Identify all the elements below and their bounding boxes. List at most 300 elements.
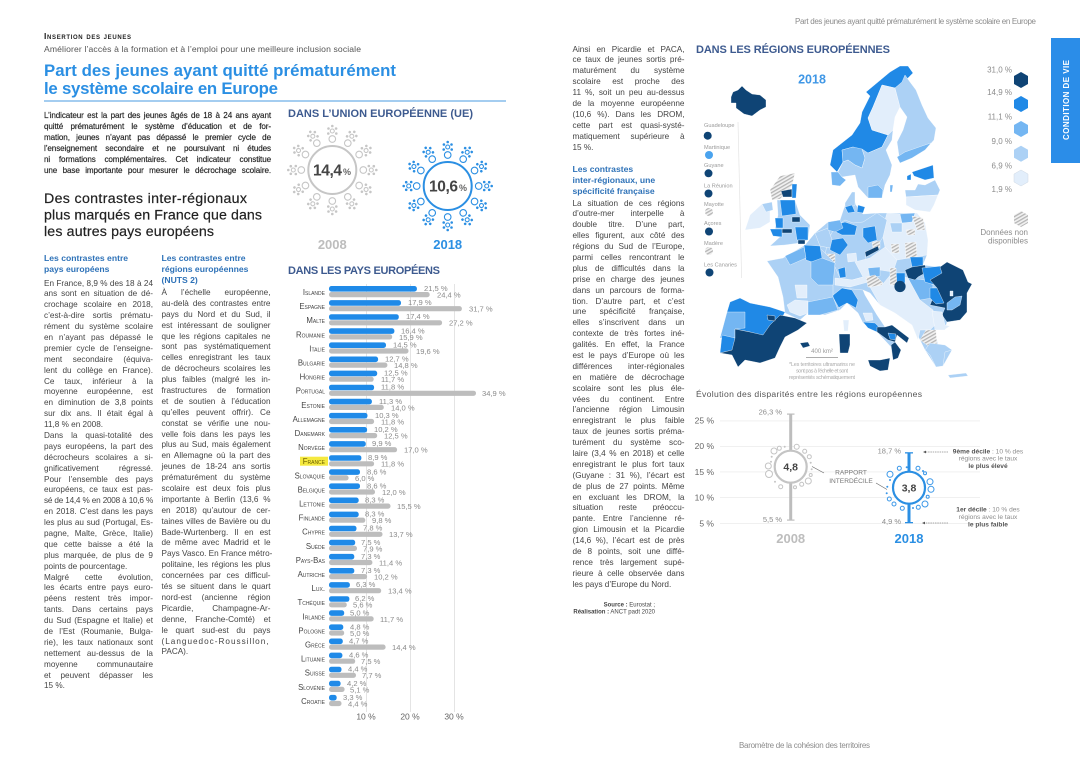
row: Slovaquie: 8,6 % [367, 467, 387, 476]
flower 2008: 14,4 %: 2008 [318, 237, 347, 252]
text column 3: bottom: scolaire sont les plus éle- [572, 384, 684, 393]
text column 1: Malgré cette évolution, [44, 573, 153, 582]
row: Espagne: 17,9 % [408, 298, 432, 307]
France [767, 245, 840, 320]
map scale and note [789, 349, 856, 381]
row: Suisse: 4,4 % [348, 665, 368, 674]
row: Finlande: Finlande [299, 514, 326, 523]
overseas: Les Canaries: Les Canaries [704, 262, 737, 268]
intro text [44, 110, 272, 175]
text column 1: du Sud (Espagne et Italie) et [44, 616, 153, 625]
Denmark [845, 192, 865, 213]
Norway [830, 66, 913, 172]
callout: 1er décile: régions avec le taux [959, 514, 1018, 521]
row: Roumanie: 15,9 % [399, 333, 423, 342]
row: Pologne: 4,8 % [350, 622, 370, 631]
row: Slovaquie: 6,0 % [355, 474, 375, 483]
text column 1: premier cycle de l’enseigne- [44, 344, 153, 353]
row: France: 8,9 % [368, 453, 388, 462]
callout: 9e décile: le plus élevé [968, 463, 1008, 470]
text column 1: moyenne européenne, est [44, 387, 153, 396]
main title [44, 61, 396, 98]
intro text: L’indicateur est la part des jeunes âgés de 18 à 24 ans ayant [44, 110, 271, 120]
callout: 1er décile: 1er décile : 10 % des [956, 506, 1020, 514]
axis labels [356, 712, 464, 722]
source [573, 602, 656, 616]
Italy [832, 288, 909, 371]
overseas: Mayotte: Mayotte [704, 202, 724, 208]
row: Belgique: Belgique [298, 485, 326, 494]
text column 2: prématurément du système [162, 473, 270, 482]
row: Malte: Malte [306, 316, 326, 325]
subheading: column 1: Les contrastes entre [44, 252, 128, 262]
row: Chypre: Chypre [302, 528, 326, 537]
row: Hongrie [300, 369, 408, 384]
row: Grèce: Grèce [305, 640, 326, 650]
text column 2: qu’elles peuvent offrir). Ce [162, 408, 270, 417]
row: Finlande: 9,8 % [372, 516, 392, 525]
text column 3: bottom: contexte de très fortes iné- [572, 329, 684, 338]
text column 1: lent du collège en France). [44, 366, 153, 375]
row: Slovénie: 4,2 % [347, 679, 367, 688]
map legend: 9,0 % [992, 137, 1012, 146]
map scale and note: 400 km² [811, 349, 833, 355]
text column 2: le quart sud-est du pays [162, 626, 270, 635]
text column 2: importante à Berlin (13,6 % [162, 495, 270, 504]
text column 2: À l’échelle européenne, [162, 288, 270, 297]
flower 2008: 14,4 %: 14,4 [313, 162, 342, 180]
subheading: column 2: régions européennes [162, 264, 248, 274]
subheading: column 3 [572, 164, 655, 196]
section tab: condition de vie: CONDITION DE VIE [1062, 59, 1071, 140]
text column 2: nord-est (ancienne région [162, 593, 270, 602]
row: Lettonie: 15,5 % [397, 502, 421, 511]
row: Hongrie: 12,5 % [384, 369, 408, 378]
Ireland [745, 202, 773, 230]
text column 1: Dans la quasi-totalité des [44, 431, 153, 440]
row: Autriche: Autriche [298, 570, 326, 579]
row: Allemagne: 11,8 % [381, 417, 404, 426]
row: Belgique: 12,0 % [382, 488, 406, 497]
row: Malte: 27,2 % [449, 319, 473, 328]
row: Pays-Bas [296, 552, 402, 567]
row: Islande: 24,4 % [437, 290, 461, 300]
row: Irlande: 5,0 % [350, 608, 370, 617]
text column 3: bottom: de 8 points, soit une diffé- [572, 547, 684, 556]
Baltic states [905, 165, 940, 212]
text column 3: top: scolaire est proche des [572, 77, 684, 86]
row: Pologne: 5,0 % [350, 629, 370, 638]
text column 3: bottom: plus de difficultés dans la [572, 264, 684, 273]
overseas: Açores [704, 221, 722, 236]
text column 2: Picardie, Champagne-Ar- [162, 604, 270, 613]
text column 2: constat se vérifie une nou- [162, 419, 270, 428]
text column 3: bottom: dans un parcours de forma- [572, 286, 684, 295]
row: Italie: 14,5 % [393, 340, 417, 349]
text column 1: c’est-à-dire sortis prématu- [44, 311, 153, 320]
row: Norvège [298, 439, 428, 455]
text column 1: les écarts entre pays euro- [44, 583, 153, 592]
section heading: contrasts [44, 191, 262, 240]
text column 2: scolaire est deux fois plus [162, 484, 270, 493]
Poland [882, 213, 928, 260]
y axis labels [695, 416, 714, 528]
text column 2: et de soutien à l’éducation [162, 397, 270, 406]
intro text: une base importante pour mesurer le décrochage scolaire. [44, 166, 271, 174]
row: Allemagne: Allemagne [293, 415, 326, 424]
flower 2018: 10,6 %: 10,6 [429, 178, 458, 196]
range 2008: 2008 [776, 531, 805, 546]
Iceland [731, 86, 766, 116]
text column 1: que cette baisse a été la [44, 540, 153, 549]
text column 3: bottom: en excluant les DROM, la [572, 493, 684, 502]
text column 1: 15 %. [44, 681, 65, 690]
text column 1: gnificativement régressé. [44, 464, 153, 473]
range 2008 [759, 408, 813, 546]
map scale and note: représentés schématiquement [789, 375, 856, 381]
row: Croatie: 4,4 % [348, 699, 368, 708]
overseas: Les Canaries [704, 262, 737, 276]
text column 2 [161, 288, 272, 656]
row: Chypre: 7,8 % [363, 524, 383, 533]
label: rapport interdécile [812, 466, 887, 490]
text column 1: en 2018. C’est dans les pays [44, 507, 153, 516]
map legend: Données non [980, 228, 1028, 237]
text column 3: bottom: différences inter-régionales [572, 362, 684, 371]
text column 1: En France, 8,9 % des 18 à 24 [44, 278, 153, 288]
text column 3: top: 15 %. [572, 143, 593, 152]
text column 2: que les régions capitales ne [162, 332, 270, 341]
row: Roumanie: 16,4 % [401, 326, 425, 335]
axis labels: 20 % [400, 712, 420, 722]
row: Portugal [296, 383, 506, 398]
row: Belgique: 8,6 % [367, 481, 387, 490]
text column 3: bottom: enregistrant le plus fort taux [572, 460, 684, 469]
y axis labels: 20 % [695, 441, 714, 451]
map legend [980, 66, 1028, 246]
row: Malte [306, 312, 473, 328]
row: France [303, 453, 404, 469]
row: Lettonie: 8,3 % [365, 496, 385, 504]
text column 1: moyenne communautaire [44, 660, 153, 669]
text column 2: de même avec Madrid et le [162, 538, 270, 547]
Romania and Bulgaria [922, 262, 972, 322]
text column 2: Pays Vasco. En France métro- [162, 549, 272, 558]
row: Italie [309, 340, 440, 356]
axis labels: 10 % [356, 712, 376, 722]
flower 2008: 14,4 %: % [343, 167, 351, 177]
text column 2: plus faibles (malgré les in- [162, 375, 270, 384]
page footer: Baromètre de la cohésion des territoires [739, 741, 870, 750]
row: Hongrie: Hongrie [300, 373, 326, 382]
row: Lituanie: Lituanie [301, 655, 326, 664]
overseas: Madère: Madère [704, 241, 723, 247]
text column 1: ans sont en situation de dé- [44, 289, 153, 298]
map legend: 11,1 % [988, 112, 1012, 122]
text column 2: pays du Nord et du Sud, il [162, 310, 270, 319]
row: Estonie [301, 397, 415, 412]
text column 3: bottom: situation reste préoccu- [572, 503, 684, 512]
row: Estonie: 14,0 % [391, 403, 415, 412]
text column 1: pays européens, la part des [44, 442, 153, 451]
overseas: Guyane: Guyane [704, 163, 724, 169]
row: Tchéquie: 6,2 % [355, 594, 375, 603]
row: Norvège: 9,9 % [372, 439, 392, 448]
overseas: La Réunion [704, 184, 733, 198]
text column 2: frastructures de formation [162, 386, 270, 395]
text column 1: nettement au-dessus de la [44, 649, 153, 658]
row: Autriche: 7,3 % [361, 566, 381, 575]
row: Portugal: Portugal [296, 387, 325, 396]
row: Belgique [298, 481, 406, 497]
label: rapport interdécile: RAPPORT [835, 470, 867, 476]
row: Slovénie [298, 679, 370, 694]
row: Suède: 7,5 % [361, 538, 381, 547]
text column 2: (Languedoc-Roussillon, [162, 636, 270, 646]
text column 3: bottom: (14,6 %), l’écart est de près [572, 536, 684, 545]
text column 2: taines villes de Bavière ou du [162, 517, 270, 526]
row: Suisse [305, 665, 382, 680]
row: Hongrie: 11,7 % [381, 375, 404, 384]
row: Portugal: 34,9 % [482, 389, 506, 398]
text column 3: bottom: rence très largement supé- [572, 558, 684, 567]
flower 2018: 10,6 %: % [459, 183, 467, 193]
overseas: Mayotte [704, 202, 724, 216]
overseas: Martinique [704, 145, 730, 159]
row: Malte: 17,4 % [406, 312, 430, 321]
text column 3: top [572, 44, 685, 152]
text column 1: sur dix ans. Il était égal à [44, 409, 153, 418]
y axis labels: 10 % [695, 492, 714, 502]
text column 3: bottom: parmi celles rencontrant le [572, 253, 684, 262]
text column 1: Pour l’ensemble des pays [44, 475, 153, 484]
text column 3: bottom: taux de jeunes sortis préma- [572, 427, 684, 436]
text column 3: top: de la moyenne européenne [572, 99, 684, 108]
text column 3: top: matiquement supérieure à [572, 132, 684, 141]
flower 2018: 10,6 % [402, 141, 493, 252]
text column 2: de décrocheurs scolaires les [162, 364, 270, 373]
row: Roumanie: Roumanie [296, 330, 326, 339]
section heading: contrasts: Des contrastes inter-régionaux [44, 191, 247, 207]
bar chart: countries [293, 284, 506, 722]
subheading: column 3: Les contrastes [572, 164, 633, 174]
Germany [822, 213, 887, 280]
row: Italie: Italie [309, 344, 326, 353]
row: Italie: 19,6 % [416, 347, 440, 356]
text column 3: bottom: pante. Entre l’ancienne ré- [572, 514, 684, 523]
overseas: Martinique: Martinique [704, 145, 730, 151]
row: Croatie [301, 693, 368, 708]
text column 2: concernées par ces difficul- [162, 571, 270, 580]
row: Croatie: 3,3 % [343, 693, 363, 702]
text column 3: bottom: double titre. D’une part, [572, 220, 684, 229]
Iberia [720, 298, 810, 367]
row: Irlande: 11,7 % [380, 615, 403, 624]
row: Slovénie: Slovénie [298, 683, 326, 692]
row: Croatie: Croatie [301, 697, 326, 706]
text column 2: PACA). [162, 647, 188, 656]
text column 1: 11,8 % en 2008. [44, 420, 103, 429]
row: Lettonie: Lettonie [299, 500, 326, 508]
flower 2018: 10,6 %: 2018 [433, 237, 462, 252]
text column 3: top: maturément du système [572, 66, 684, 75]
map legend: disponibles [988, 236, 1028, 246]
choropleth map of Europe [720, 66, 972, 378]
callout: 1er décile: le plus faible [968, 522, 1008, 528]
range 2008: 5,5 % [763, 515, 782, 524]
row: Tchéquie: 5,6 % [353, 601, 373, 610]
text column 3: bottom: turément du système sco- [572, 438, 684, 447]
text column 2: en Allemagne où la part des [162, 451, 270, 460]
row: Lituanie: 7,5 % [361, 657, 381, 666]
Sweden [831, 85, 900, 198]
y axis labels: 25 % [695, 416, 714, 426]
subheading: column 1: pays européens [44, 264, 109, 274]
text column 3: bottom: elles figurent, aux côté des [572, 231, 684, 240]
text column 3: bottom [572, 198, 684, 589]
text column 3: bottom: est le pays d’Europe où les [572, 351, 684, 360]
text column 1: en n’ayant pas dépassé le [44, 333, 153, 342]
row: Irlande [303, 608, 403, 624]
text column 1 [44, 278, 154, 690]
text column 3: bottom: en matière de décrochage [572, 373, 684, 382]
text column 3: bottom: (Guyane : 31 %), l’écart est [572, 471, 684, 480]
row: Suède: 7,9 % [363, 544, 383, 553]
text column 3: bottom: d’outre-mer interpelle à [572, 209, 684, 218]
row: Roumanie [296, 326, 425, 342]
flower 2008: 14,4 % [287, 125, 378, 252]
row: Luxembourg: Lux. [312, 584, 325, 593]
row: Suède: Suède [306, 542, 326, 551]
text column 2: au-delà des contrastes entre [162, 299, 270, 308]
capital region dot [894, 281, 906, 292]
text column 3: bottom: l’ancienne région Limousin [572, 405, 684, 414]
row: Danemark: Danemark [295, 429, 326, 438]
intro text: ni formations complémentaires. Cet indicateur constitue [44, 154, 271, 164]
label: rapport interdécile: INTERDÉCILE [829, 476, 873, 485]
text column 1: plus marquée, de plus de 9 [44, 551, 153, 560]
text column 3: bottom: régions du Sud de l’Europe, [572, 242, 684, 251]
row: Autriche [298, 566, 398, 582]
Central Europe [835, 247, 897, 288]
row: Suède [306, 538, 383, 553]
row: Finlande: 8,3 % [365, 510, 385, 519]
overseas: La Réunion: La Réunion [704, 184, 733, 190]
map legend: 31,0 % [987, 66, 1012, 74]
row: Lituanie [301, 651, 381, 666]
map legend: 6,9 % [992, 162, 1012, 170]
callout: 9e décile [923, 448, 1024, 470]
source: Source : Eurostat ; [604, 602, 655, 608]
text column 3: top: 11 %, soit un peu au-dessus [572, 88, 684, 97]
text column 3: top: (10,6 %). Dans les DROM, [572, 110, 684, 119]
row: Slovaquie [295, 467, 387, 483]
continental base [767, 192, 972, 367]
row: Allemagne: 10,3 % [375, 411, 399, 420]
row: Tchéquie [297, 594, 375, 610]
text column 1: pagne, Malte, Grèce, Italie) [44, 529, 153, 538]
text column 2: denne, Franche-Comté) et [162, 615, 270, 624]
source: Réalisation : ANCT padt 2020 [573, 610, 656, 616]
text column 2: velle fois dans les pays les [162, 430, 270, 439]
text column 3: bottom: rieure à celle observée dans [572, 569, 684, 578]
heading: EU: DANS L’UNION EUROPÉENNE (UE) [288, 107, 473, 120]
text column 1: européens, ce taux est pas- [44, 485, 153, 494]
row: Suisse: Suisse [305, 669, 326, 678]
row: Danemark: 10,2 % [374, 425, 398, 434]
range 2018: 4,9 % [882, 517, 901, 526]
range 2008: 4,8 [783, 462, 798, 474]
text column 3: bottom: gion Limousin et la Picardie [572, 525, 684, 534]
row: Lettonie [299, 496, 421, 511]
text column 3: bottom: galités. En effet, la France [572, 340, 684, 349]
row: Portugal: 11,8 % [381, 383, 404, 392]
Benelux [815, 220, 843, 248]
text column 3: bottom: laire (3,4 % en 2018) et celle [572, 449, 684, 458]
text column 1: Ce taux, inférieur à la [44, 377, 153, 386]
overseas: Guyane [704, 163, 724, 177]
text column 2: sont pas systématiquement [162, 342, 270, 351]
United Kingdom [770, 173, 810, 246]
text column 1: de l’Est (Roumanie, Bulga- [44, 627, 153, 636]
row: Danemark: 12,5 % [384, 432, 408, 440]
row: Luxembourg: 6,3 % [356, 580, 376, 589]
row: Espagne: 31,7 % [469, 305, 493, 314]
row: Pays-Bas: 7,3 % [361, 552, 381, 561]
text column 3: top: cette part est quasi-systé- [572, 121, 684, 130]
section label: Insertion des jeunes [44, 31, 131, 41]
text column 1: tants. Dans certains pays [44, 605, 153, 614]
subheading: column 3: spécificité française [572, 186, 655, 196]
row: France: 11,8 % [381, 460, 404, 469]
text column 1: sé de 14,4 % en 2008 à 10,6 % [44, 496, 153, 505]
text column 2: jeunes de 18-24 ans sortis [162, 462, 270, 471]
heading: regions: DANS LES RÉGIONS EUROPÉENNES [696, 43, 890, 56]
heading: countries: DANS LES PAYS EUROPÉENS [288, 264, 440, 277]
row: Pays-Bas: 11,4 % [379, 558, 402, 567]
row: Autriche: 10,2 % [374, 572, 398, 582]
row: Chypre: 13,7 % [389, 530, 413, 539]
row: Suisse: 7,7 % [362, 671, 382, 680]
row: Grèce: 14,4 % [392, 643, 416, 652]
text column 1: les plus au sud (Portugal, Es- [44, 518, 153, 527]
intro text: mation, jeunes n’ayant pas dépassé le premier cycle de [44, 132, 271, 142]
text column 3: bottom: La situation de ces régions [572, 198, 684, 208]
row: Islande: Islande [303, 288, 326, 297]
row: Lituanie: 4,6 % [349, 651, 369, 660]
text column 1: rément du système scolaire [44, 322, 153, 331]
text column 1: en diminution de 3,8 points [44, 398, 153, 407]
text column 1: rie), les taux nationaux sont [44, 638, 153, 647]
text column 2: celles enregistrant les taux [162, 353, 270, 362]
text column 1: crochage scolaire en 2018, [44, 300, 153, 309]
row: Bulgarie: Bulgarie [298, 358, 326, 368]
section heading: contrasts: les autres pays européens [44, 224, 214, 240]
text column 2: politaine, les régions les plus [162, 560, 270, 569]
row: Pays-Bas: Pays-Bas [296, 556, 326, 565]
overseas: Guadeloupe: Guadeloupe [704, 123, 734, 129]
intro text: l’enseignement secondaire et ne poursuivant ni études [44, 144, 271, 152]
range 2018: 3,8 [902, 482, 916, 494]
row: Norvège: Norvège [298, 443, 326, 452]
Balkans [870, 257, 935, 340]
text column 2: plus au Sud, mais également [162, 440, 270, 449]
row: Pologne: Pologne [298, 626, 326, 635]
row: Grèce [305, 636, 416, 652]
text column 2: tés se situent dans le quart [162, 582, 270, 591]
section tab: condition de vie [1051, 38, 1080, 163]
Finland [895, 75, 936, 163]
